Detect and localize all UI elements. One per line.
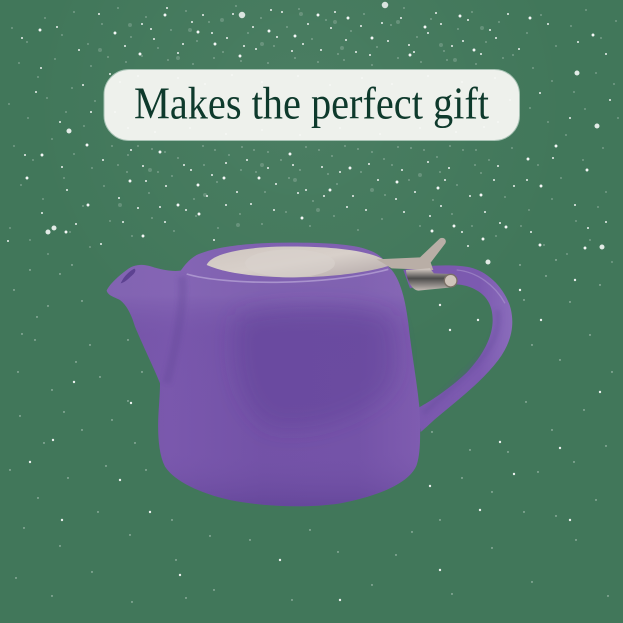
teapot rim highlight (187, 269, 388, 282)
metal hinge clip (406, 268, 457, 291)
teapot illustration (107, 238, 512, 506)
teapot spout shadow line (167, 277, 183, 383)
pill banner (104, 70, 520, 140)
teapot body shading (107, 243, 420, 506)
metal hinge pin (444, 274, 457, 287)
teapot handle (403, 265, 512, 432)
teapot spout opening (121, 269, 135, 283)
pill speckles (115, 75, 510, 135)
lid disc (245, 249, 335, 277)
teapot body and spout (107, 243, 420, 506)
pill text: Makes the perfect gift (134, 78, 489, 128)
teapot reflection (234, 307, 397, 428)
teapot lid (207, 246, 388, 277)
metal lid arm (377, 238, 446, 270)
